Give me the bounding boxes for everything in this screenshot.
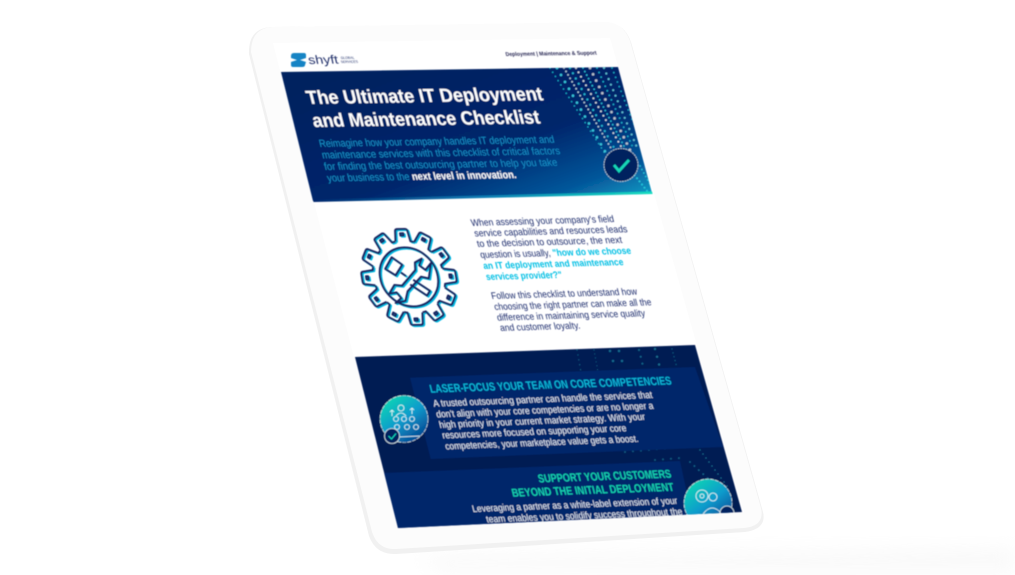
dotted light streaks (550, 68, 652, 192)
heading (510, 468, 675, 500)
tablet screen (273, 38, 744, 528)
highlighted question: services provider?" (485, 270, 563, 283)
dotted texture (577, 349, 730, 490)
tablet shadow (420, 548, 1015, 572)
highlighted question: an IT deployment and maintenance (482, 257, 625, 272)
panel: hero banner (281, 67, 653, 202)
logo wordmark: shyft (307, 53, 340, 67)
icon: gear with tools (354, 228, 465, 327)
follow-up text block: difference in maintaining service quality (496, 308, 647, 324)
panel: support customers (384, 461, 734, 535)
intro paragraph: for finding the best outsourcing partner to help you take (323, 157, 559, 173)
follow-up text block: and customer loyalty. (499, 321, 581, 334)
logo tagline: GLOBAL (340, 56, 355, 60)
panel: dark checklist section (355, 345, 742, 535)
body text: don't align with your core competencies or are no longer a (435, 401, 655, 420)
tablet body (249, 22, 764, 554)
intro text block: question is usually, "how do we choose (479, 246, 633, 261)
heading: LASER-FOCUS YOUR TEAM ON CORE COMPETENCIES (428, 375, 673, 396)
intro text block: When assessing your company's field (470, 214, 615, 229)
logo (291, 53, 359, 67)
intro paragraph (318, 134, 561, 184)
logo icon (291, 53, 306, 67)
check badge (384, 428, 400, 444)
intro text block (470, 214, 633, 283)
highlighted question (482, 257, 625, 283)
body text: resources more focused on supporting your core (441, 423, 628, 441)
logo tagline: SERVICES (340, 60, 359, 64)
top navigation text: Deployment | Maintenance & Support (505, 51, 598, 58)
body text: competencies, your marketplace value gets a boost. (444, 434, 640, 452)
title: and Maintenance Checklist (310, 108, 543, 132)
icon: team circle (380, 396, 428, 444)
title: The Ultimate IT Deployment (304, 84, 546, 109)
follow-up text block: choosing the right partner can make all the (493, 297, 653, 313)
body text (471, 496, 684, 525)
intro paragraph: maintenance services with this checklist of critical factors (320, 145, 561, 161)
intro text block: to the decision to outsource, the next (476, 235, 624, 250)
icon: check badge (604, 148, 638, 182)
follow-up text block: Follow this checklist to understand how (490, 287, 639, 302)
follow-up text block (490, 287, 653, 334)
panel: core competencies (410, 367, 723, 459)
logo tagline (340, 56, 359, 64)
body text: team enables you to solidify success throughout the (485, 507, 684, 525)
intro paragraph: Reimagine how your company handles IT deployment and (318, 134, 556, 150)
title (304, 84, 546, 132)
intro paragraph: your business to the next level in innovation. (326, 169, 518, 184)
heading: BEYOND THE INITIAL DEPLOYMENT (510, 481, 675, 500)
team figures (390, 405, 420, 437)
heading: SUPPORT YOUR CUSTOMERS (537, 468, 673, 485)
bottom gradient strip (313, 192, 653, 202)
intro text block: service capabilities and resources leads (473, 224, 629, 239)
icon: customer circle (682, 478, 736, 516)
body text: high priority in your current market strategy. With your (438, 412, 647, 431)
body text (432, 390, 655, 452)
body text: Leveraging a partner as a white-label extension of your (471, 496, 679, 515)
body text: A trusted outsourcing partner can handle the services that (432, 390, 654, 410)
